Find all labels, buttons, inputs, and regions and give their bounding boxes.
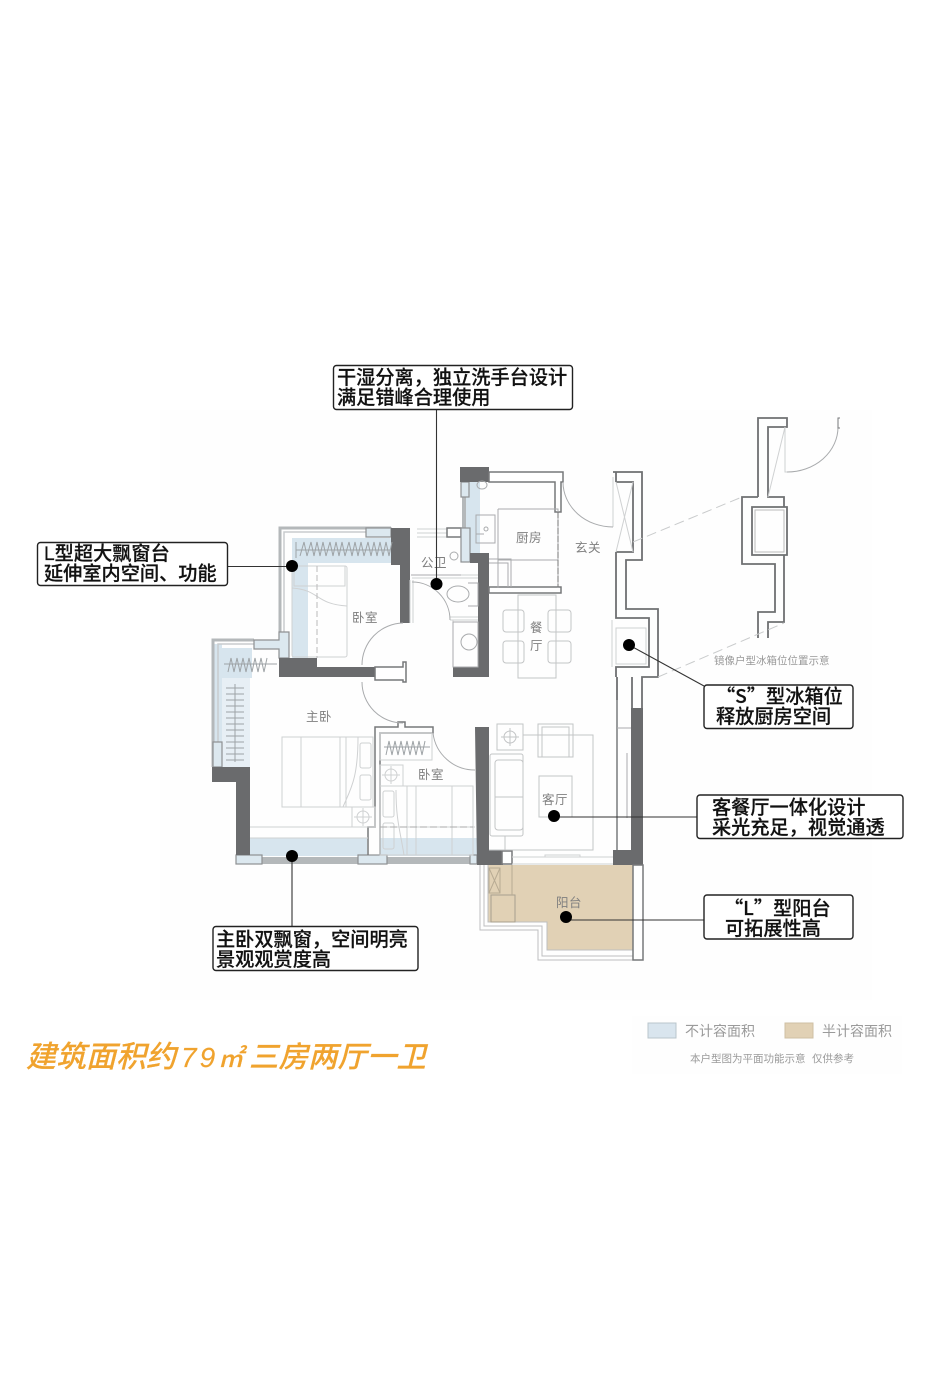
room labels	[306, 530, 601, 910]
entry cabinet cross	[612, 477, 646, 667]
dining table and chairs	[503, 595, 571, 678]
title: 建筑面积约	[26, 1041, 179, 1074]
disclaimer: 本户型图为平面功能示意	[690, 1053, 806, 1065]
callout: living and dining room	[548, 795, 903, 839]
kitchen fixtures	[476, 481, 558, 588]
callout: L-shaped bay window: 延伸室内空间、功能	[44, 563, 217, 585]
room labels: 厨房	[516, 530, 542, 545]
room labels: 玄关	[575, 540, 601, 555]
legend label: half counted area: 半计容面积	[822, 1023, 892, 1039]
mirrored unit caption: 镜像户型冰箱位位置示意	[714, 654, 830, 667]
callout: L-shaped balcony	[560, 893, 853, 940]
callout: S-shaped fridge niche: 释放厨房空间	[716, 706, 831, 728]
callout: master bedroom double bay window: 景观观赏度高	[216, 949, 331, 971]
entry and fridge niche wall	[613, 472, 658, 850]
callout: wet and dry separation: 满足错峰合理使用	[337, 387, 490, 409]
callout: master bedroom double bay window: 主卧双飘窗，空间明亮	[216, 929, 408, 951]
non-counted blue areas	[214, 482, 480, 856]
mirrored unit fridge niche diagram	[633, 418, 787, 677]
title: ㎡	[218, 1039, 248, 1075]
room labels: 主卧	[306, 710, 332, 724]
living room furniture	[489, 700, 631, 850]
room labels: 阳台	[556, 895, 582, 910]
dark structural walls	[212, 467, 643, 865]
callout: master bedroom double bay window	[213, 850, 418, 971]
callout: L-shaped balcony: 可拓展性高	[725, 918, 821, 940]
room labels: 客厅	[542, 792, 568, 807]
room labels: 卧室	[418, 767, 444, 782]
callout: S-shaped fridge niche	[623, 639, 853, 728]
callout: L-shaped bay window: L型超大飘窗台	[44, 543, 170, 565]
callout: living and dining room: 客餐厅一体化设计	[712, 797, 866, 819]
door arcs	[362, 418, 840, 770]
room labels: 餐	[530, 620, 543, 635]
legend label: not counted area: 不计容面积	[685, 1023, 755, 1039]
balcony tan area	[488, 865, 633, 950]
room labels: 厅	[530, 639, 543, 653]
balcony details	[480, 865, 643, 960]
disclaimer: 仅供参考	[812, 1052, 854, 1065]
legend swatch: half counted area	[785, 1023, 813, 1038]
title: 79	[181, 1042, 218, 1073]
callout: wet and dry separation: 干湿分离，独立洗手台设计	[337, 367, 567, 389]
floor plan	[212, 418, 840, 960]
legend	[632, 1016, 902, 1074]
bathroom fixtures	[411, 552, 478, 667]
window frames	[213, 482, 477, 864]
callout: wet and dry separation	[334, 366, 572, 590]
callout: L-shaped bay window	[38, 542, 298, 586]
callout: L-shaped balcony: “L”型阳台	[724, 893, 831, 921]
legend swatch: not counted area	[648, 1023, 676, 1038]
room labels: 公卫	[421, 556, 447, 570]
bedroom furniture	[224, 542, 473, 855]
title: 三房两厅一卫	[249, 1041, 429, 1074]
callout: S-shaped fridge niche: “S”型冰箱位	[716, 681, 843, 709]
room labels: 卧室	[352, 610, 378, 625]
callout: living and dining room: 采光充足，视觉通透	[712, 817, 885, 839]
thin walls and door stubs	[250, 472, 613, 864]
